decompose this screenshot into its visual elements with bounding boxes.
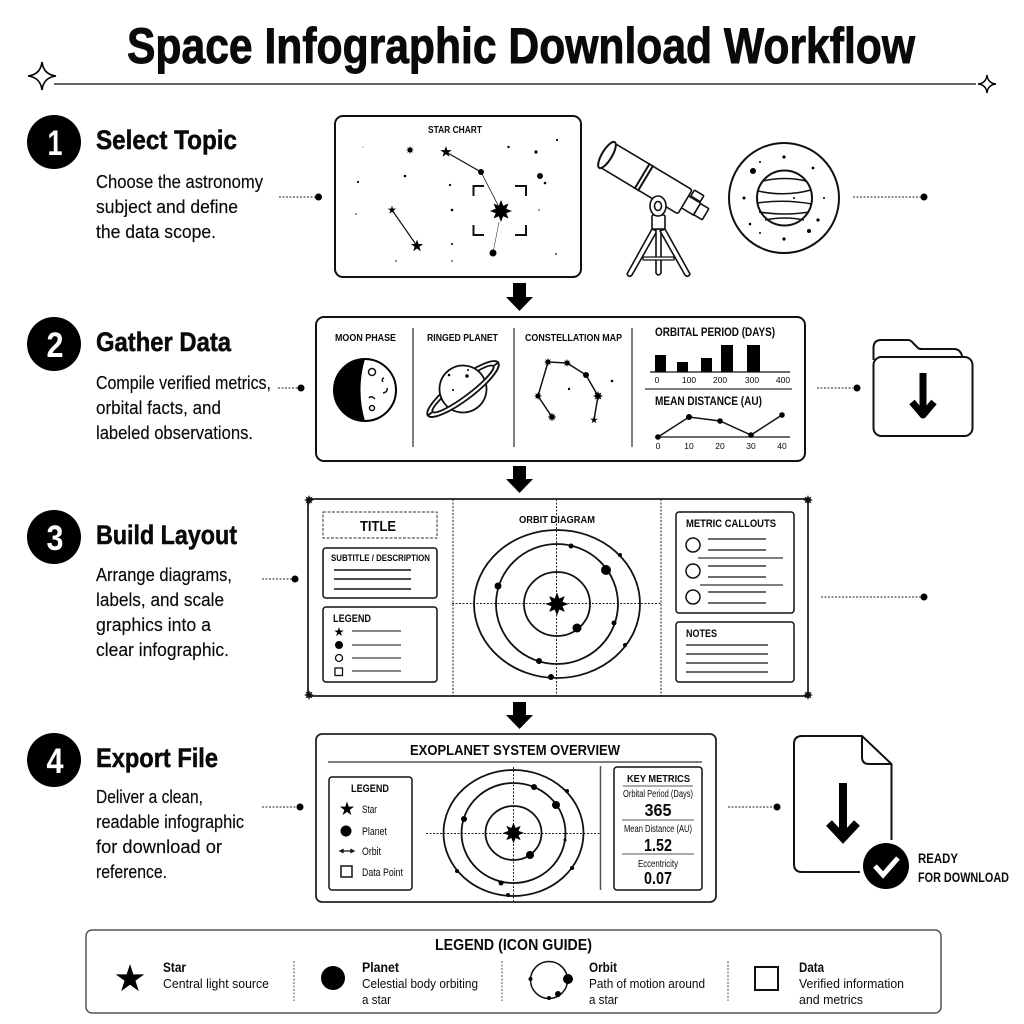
step 2 description: Compile verified metrics,: [96, 372, 271, 393]
key metrics: 0.07: [644, 868, 672, 888]
step 4 description: reference.: [96, 861, 167, 882]
step 2 heading: Gather Data: [96, 327, 232, 357]
step 4 description: Deliver a clean,: [96, 786, 203, 807]
step 4 text: [27, 733, 244, 882]
panel: build layout: [304, 495, 813, 700]
panel: export preview: [316, 734, 716, 902]
constellation map: [525, 332, 622, 423]
export title: EXOPLANET SYSTEM OVERVIEW: [410, 742, 621, 759]
legend item: planet: [321, 960, 478, 1007]
key metrics: 1.52: [644, 835, 672, 855]
key metrics: KEY METRICS: [627, 773, 690, 785]
key metrics: [614, 767, 702, 890]
panel: gather data: [316, 317, 805, 461]
legend item: planet: a star: [362, 992, 392, 1007]
step 1 heading: Select Topic: [96, 125, 237, 155]
icon: planet in circle: [729, 143, 839, 253]
legend item: orbit: [528, 960, 705, 1007]
legend item: orbit: a star: [589, 992, 619, 1007]
connector 4 right: [728, 804, 780, 810]
step 2 description: [96, 372, 271, 443]
bar chart: orbital period: [650, 327, 790, 385]
step 3 badge: 3: [46, 519, 64, 558]
bar chart: orbital period: 200: [713, 375, 727, 385]
bar chart: orbital period: 400: [776, 375, 790, 385]
ready label: READY: [918, 851, 958, 866]
step 1 description: [96, 171, 264, 242]
legend item: orbit: Orbit: [589, 960, 617, 975]
export orbit diagram: [426, 766, 601, 902]
panel: legend icon guide: [86, 930, 941, 1013]
connector 3 left: [262, 576, 298, 582]
step 1 badge: [27, 115, 81, 169]
legend item: planet: Planet: [362, 960, 399, 975]
line chart: mean distance: 40: [777, 441, 787, 451]
star chart heading: STAR CHART: [428, 125, 482, 136]
key metrics: Eccentricity: [638, 859, 678, 870]
moon phase: [334, 332, 396, 421]
step 3 text: [27, 510, 237, 660]
legend placeholder: [323, 607, 437, 682]
tube: [595, 140, 713, 227]
legend placeholder: LEGEND: [333, 613, 371, 625]
title placeholder: TITLE: [360, 518, 396, 535]
bar chart: orbital period: 100: [682, 375, 696, 385]
step 2 description: labeled observations.: [96, 422, 253, 443]
connector 4 left: [262, 804, 304, 810]
icon: telescope: [595, 140, 713, 276]
line chart: mean distance: MEAN DISTANCE (AU): [655, 396, 762, 408]
legend item: data: Data: [799, 960, 824, 975]
step 3 description: Arrange diagrams,: [96, 564, 232, 585]
notes: [676, 622, 794, 682]
step 1 description: subject and define: [96, 196, 238, 217]
icon: file download with ready check: [794, 736, 1009, 889]
ready label: [918, 851, 1009, 885]
line chart: mean distance: 10: [684, 441, 694, 451]
export legend: LEGEND: [351, 783, 389, 795]
orbit diagram: [474, 514, 640, 680]
step 3 description: graphics into a: [96, 614, 212, 635]
legend item: star: Star: [163, 960, 187, 975]
export legend: Star: [362, 804, 377, 816]
constellation map: CONSTELLATION MAP: [525, 332, 622, 344]
step 4 description: for download or: [96, 836, 222, 857]
notes: NOTES: [686, 628, 717, 640]
connector 1 right: [853, 194, 928, 200]
moon phase: MOON PHASE: [335, 332, 396, 344]
orbit diagram: ORBIT DIAGRAM: [519, 514, 595, 526]
legend item: data: Verified information: [799, 976, 904, 991]
key metrics: Mean Distance (AU): [624, 824, 692, 835]
step 3 description: clear infographic.: [96, 639, 229, 660]
subtitle placeholder: [323, 548, 437, 598]
subtitle placeholder: SUBTITLE / DESCRIPTION: [331, 553, 430, 564]
title: Space Infographic Download Workflow: [127, 18, 915, 74]
legend item: star: [116, 960, 269, 991]
step 2 description: orbital facts, and: [96, 397, 221, 418]
bar chart: orbital period: 300: [745, 375, 759, 385]
step 3 badge: [27, 510, 81, 564]
chart stars: [355, 139, 558, 262]
constellation lines: [392, 152, 501, 253]
step 4 badge: 4: [46, 742, 64, 781]
icon: folder download: [874, 340, 972, 436]
export legend: Orbit: [362, 846, 381, 858]
arrow 2: [506, 466, 533, 493]
legend item: planet: Celestial body orbiting: [362, 976, 478, 991]
header rule with sparkles: [28, 62, 996, 93]
bar chart: orbital period: ORBITAL PERIOD (DAYS): [655, 327, 775, 339]
step 3 description: [96, 564, 232, 660]
ringed planet: RINGED PLANET: [427, 332, 498, 344]
step 3 description: labels, and scale: [96, 589, 224, 610]
legend item: orbit: Path of motion around: [589, 976, 705, 991]
step 2 badge: 2: [46, 326, 64, 365]
metric callouts: METRIC CALLOUTS: [686, 518, 776, 530]
step 1 badge: 1: [48, 124, 62, 163]
legend item: data: and metrics: [799, 992, 863, 1007]
panel: star chart: [335, 116, 581, 277]
legend item: data: [755, 960, 904, 1007]
bar chart: orbital period: 0: [655, 375, 660, 385]
export legend: [329, 777, 412, 890]
arrow 3: [506, 702, 533, 729]
connector 3 right: [821, 594, 928, 600]
tripod: [627, 215, 690, 276]
key metrics: 365: [644, 800, 672, 820]
key metrics: Orbital Period (Days): [623, 789, 693, 800]
line chart: mean distance: 0: [656, 441, 661, 451]
metric callouts: [676, 512, 794, 613]
step 4 badge: [27, 733, 81, 787]
step 2 text: [27, 317, 271, 443]
step 4 description: [96, 786, 244, 882]
line chart: mean distance: 20: [715, 441, 725, 451]
target star with brackets: [474, 186, 526, 235]
legend item: star: Central light source: [163, 976, 269, 991]
step 1 description: the data scope.: [96, 221, 216, 242]
export legend: Planet: [362, 826, 387, 838]
line chart: mean distance: 30: [746, 441, 756, 451]
connector 2 left: [278, 384, 304, 392]
arrow 1: [506, 283, 533, 311]
step 1 description: Choose the astronomy: [96, 171, 264, 192]
line chart: mean distance: [655, 396, 790, 451]
export legend: Data Point: [362, 867, 403, 879]
legend title: LEGEND (ICON GUIDE): [435, 937, 592, 954]
step 2 badge: [27, 317, 81, 371]
step 4 description: readable infographic: [96, 811, 244, 832]
mount: [650, 196, 666, 216]
connector 1 left: [279, 194, 322, 200]
step 3 heading: Build Layout: [96, 520, 237, 550]
step 1 text: [27, 115, 264, 242]
step 4 heading: Export File: [96, 743, 218, 773]
title placeholder: [323, 512, 437, 538]
connector 2 right: [817, 384, 860, 392]
ringed planet: [414, 332, 512, 434]
